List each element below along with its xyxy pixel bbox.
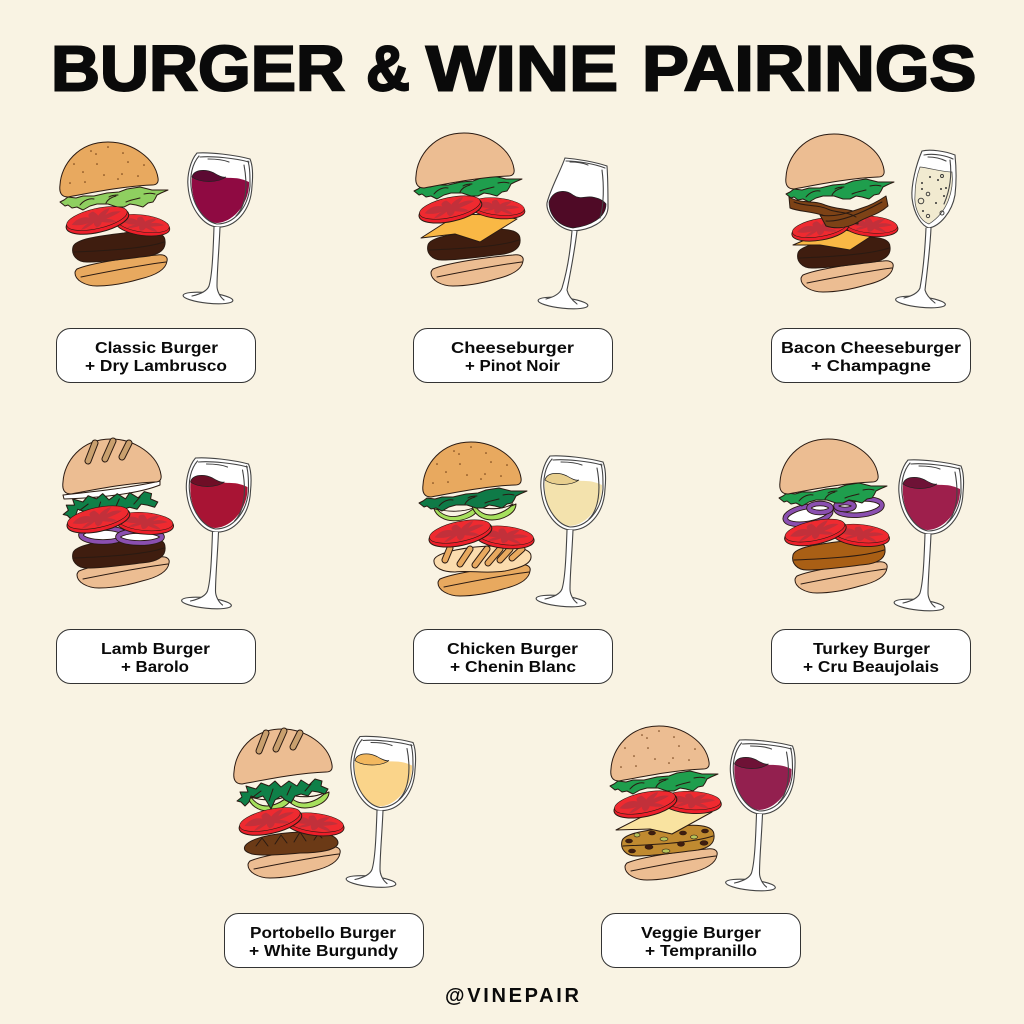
icon: wine glass, chenin blanc: [536, 456, 606, 609]
icon: cheeseburger: [414, 133, 526, 286]
panel: lamb burger and barolo: [56, 439, 256, 684]
panel: chicken burger and chenin blanc: [414, 442, 612, 684]
panel: classic burger and dry lambrusco: [56, 142, 256, 382]
icon: bacon cheeseburger: [786, 134, 899, 292]
label: portobello burger + white burgundy: [224, 914, 424, 968]
label: portobello burger + white burgundy: + White Burgundy: [249, 943, 398, 960]
label: lamb burger + barolo: [56, 630, 256, 684]
panel: portobello burger and white burgundy: [224, 729, 424, 968]
label: lamb burger + barolo: + Barolo: [121, 659, 189, 676]
label: veggie burger + tempranillo: [602, 914, 800, 968]
label: veggie burger + tempranillo: + Tempranillo: [645, 943, 757, 960]
icon: portobello burger: [234, 729, 345, 878]
label: cheeseburger + pinot noir: [414, 328, 612, 382]
label: bacon cheeseburger + champagne: [772, 328, 970, 382]
icon: turkey burger: [779, 439, 891, 593]
label: lamb burger + barolo: Lamb Burger: [101, 641, 210, 658]
panel: turkey burger and cru beaujolais: [772, 439, 970, 684]
label: chicken burger + chenin blanc: Chicken Burger: [447, 641, 578, 658]
panel: veggie burger and tempranillo: [602, 726, 800, 968]
icon: classic burger: [60, 142, 171, 286]
icon: wine glass, barolo: [181, 458, 251, 611]
icon: veggie burger: [610, 726, 722, 880]
icon: wine glass, dry lambrusco: [183, 153, 253, 306]
label: turkey burger + cru beaujolais: + Cru Beaujolais: [803, 659, 939, 676]
label: cheeseburger + pinot noir: Cheeseburger: [451, 340, 574, 357]
label: chicken burger + chenin blanc: + Chenin Blanc: [450, 659, 576, 676]
title: WINE: [426, 33, 618, 104]
label: portobello burger + white burgundy: Portobello Burger: [250, 925, 396, 942]
panel: cheeseburger and pinot noir: [414, 133, 612, 382]
title: [51, 32, 976, 105]
footer credit: @VINEPAIR: [445, 985, 580, 1007]
icon: wine glass, cru beaujolais: [894, 460, 964, 613]
label: chicken burger + chenin blanc: [414, 630, 612, 684]
label: bacon cheeseburger + champagne: + Champagne: [811, 358, 931, 375]
label: bacon cheeseburger + champagne: Bacon Cheeseburger: [781, 340, 961, 357]
title: BURGER: [51, 32, 345, 104]
label: classic burger + dry lambrusco: [56, 328, 256, 382]
title: &: [366, 33, 410, 105]
label: turkey burger + cru beaujolais: [772, 630, 970, 684]
icon: wine glass, tempranillo: [725, 740, 795, 893]
label: turkey burger + cru beaujolais: Turkey Burger: [813, 641, 930, 658]
label: classic burger + dry lambrusco: + Dry Lambrusco: [85, 358, 227, 375]
panel: bacon cheeseburger and champagne: [772, 134, 970, 382]
label: veggie burger + tempranillo: Veggie Burger: [641, 925, 761, 942]
label: cheeseburger + pinot noir: + Pinot Noir: [465, 358, 560, 375]
label: classic burger + dry lambrusco: Classic Burger: [95, 340, 218, 357]
icon: wine glass, pinot noir: [538, 158, 608, 311]
icon: chicken burger: [419, 442, 535, 596]
icon: lamb burger: [63, 439, 175, 588]
title: PAIRINGS: [642, 33, 976, 105]
icon: champagne flute: [895, 150, 956, 310]
icon: wine glass, white burgundy: [346, 736, 416, 889]
